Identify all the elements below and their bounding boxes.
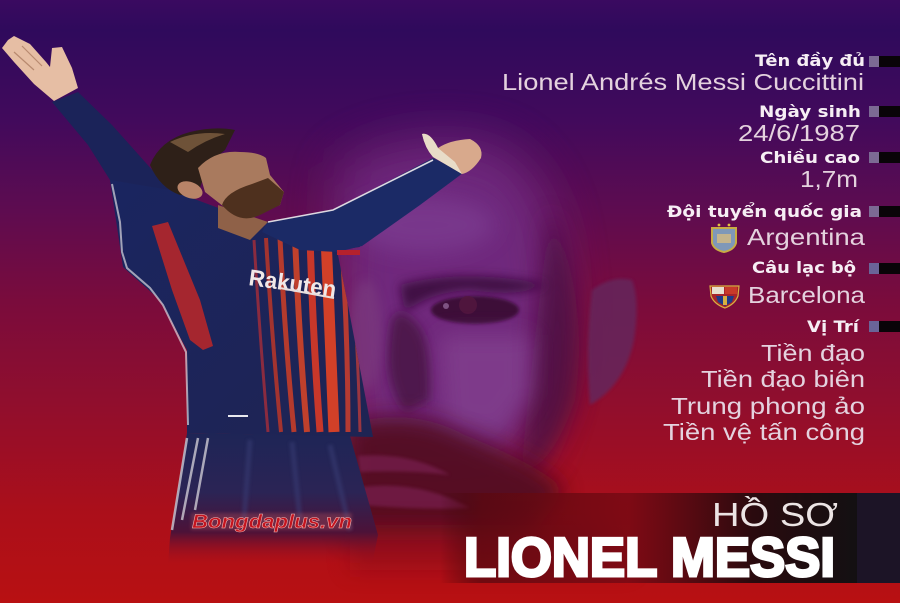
left raised hand — [2, 36, 78, 101]
left raised arm sleeve — [52, 92, 185, 250]
value: national team: Argentina — [747, 224, 866, 250]
head shape — [335, 141, 561, 478]
hand tape — [422, 134, 462, 174]
white side trim — [112, 184, 188, 425]
right hand — [422, 134, 482, 174]
jersey torso — [110, 180, 373, 437]
title: Lionel Messi: LIONEL MESSI — [464, 526, 835, 588]
red cuff under arm — [337, 250, 360, 255]
label: full name: Tên đầy đủ — [755, 51, 865, 70]
red sleeve side panel — [152, 222, 213, 350]
hair — [150, 128, 235, 195]
eye — [431, 296, 519, 324]
value: birth date: 24/6/1987 — [738, 120, 860, 146]
neck and collar — [218, 205, 268, 240]
background portrait: large face — [335, 141, 637, 570]
left cheek highlight — [350, 280, 382, 390]
hair highlight — [170, 133, 225, 152]
value: position 3: Trung phong ảo — [671, 393, 865, 419]
value: height: 1,7m — [800, 166, 858, 192]
value: position 1: Tiền đạo — [761, 340, 865, 366]
marker: club — [869, 263, 900, 274]
label: position: Vị Trí — [807, 317, 861, 336]
marker: birth date — [869, 106, 900, 117]
value: position 2: Tiền đạo biên — [701, 366, 865, 392]
marker: full name — [869, 56, 900, 67]
icon: Argentina crest — [712, 224, 736, 252]
profile details — [502, 51, 900, 445]
watermark: Bongdaplus.vn: Bongdaplus.vn — [192, 512, 352, 533]
right arm white trim — [268, 160, 433, 222]
moustache and beard — [345, 417, 565, 540]
label: height: Chiều cao — [760, 148, 860, 167]
icon: Barcelona crest — [710, 286, 739, 308]
marker: height — [869, 152, 900, 163]
beard — [222, 178, 284, 218]
marker: national team — [869, 206, 900, 217]
label: club: Câu lạc bộ — [752, 258, 856, 277]
value: full name: Lionel Andrés Messi Cuccittini — [502, 69, 864, 95]
sponsor underline — [280, 288, 334, 298]
icon: ear — [588, 279, 637, 405]
eyebrow — [400, 276, 547, 312]
title: Hồ sơ: HỒ SƠ — [712, 496, 838, 533]
marker: position — [869, 321, 900, 332]
chin fade into red — [350, 525, 630, 570]
value: club: Barcelona — [748, 282, 866, 308]
right side face shadow — [520, 210, 579, 480]
shorts — [168, 433, 378, 565]
right extended arm sleeve — [262, 158, 463, 252]
value: position 4: Tiền vệ tấn công — [663, 419, 865, 445]
sponsor logo: Rakuten — [247, 264, 338, 302]
ear — [175, 178, 205, 202]
label: birth date: Ngày sinh — [759, 102, 861, 121]
nose shadow — [388, 312, 431, 412]
lips — [358, 455, 470, 509]
jersey stripes — [254, 236, 360, 432]
cheek highlight — [440, 335, 530, 435]
player photo: Lionel Messi — [2, 36, 482, 565]
label: national team: Đội tuyển quốc gia — [667, 202, 862, 221]
face — [198, 152, 284, 214]
jersey hem label — [228, 415, 248, 417]
title band — [440, 493, 900, 588]
forehead highlight — [355, 197, 495, 253]
